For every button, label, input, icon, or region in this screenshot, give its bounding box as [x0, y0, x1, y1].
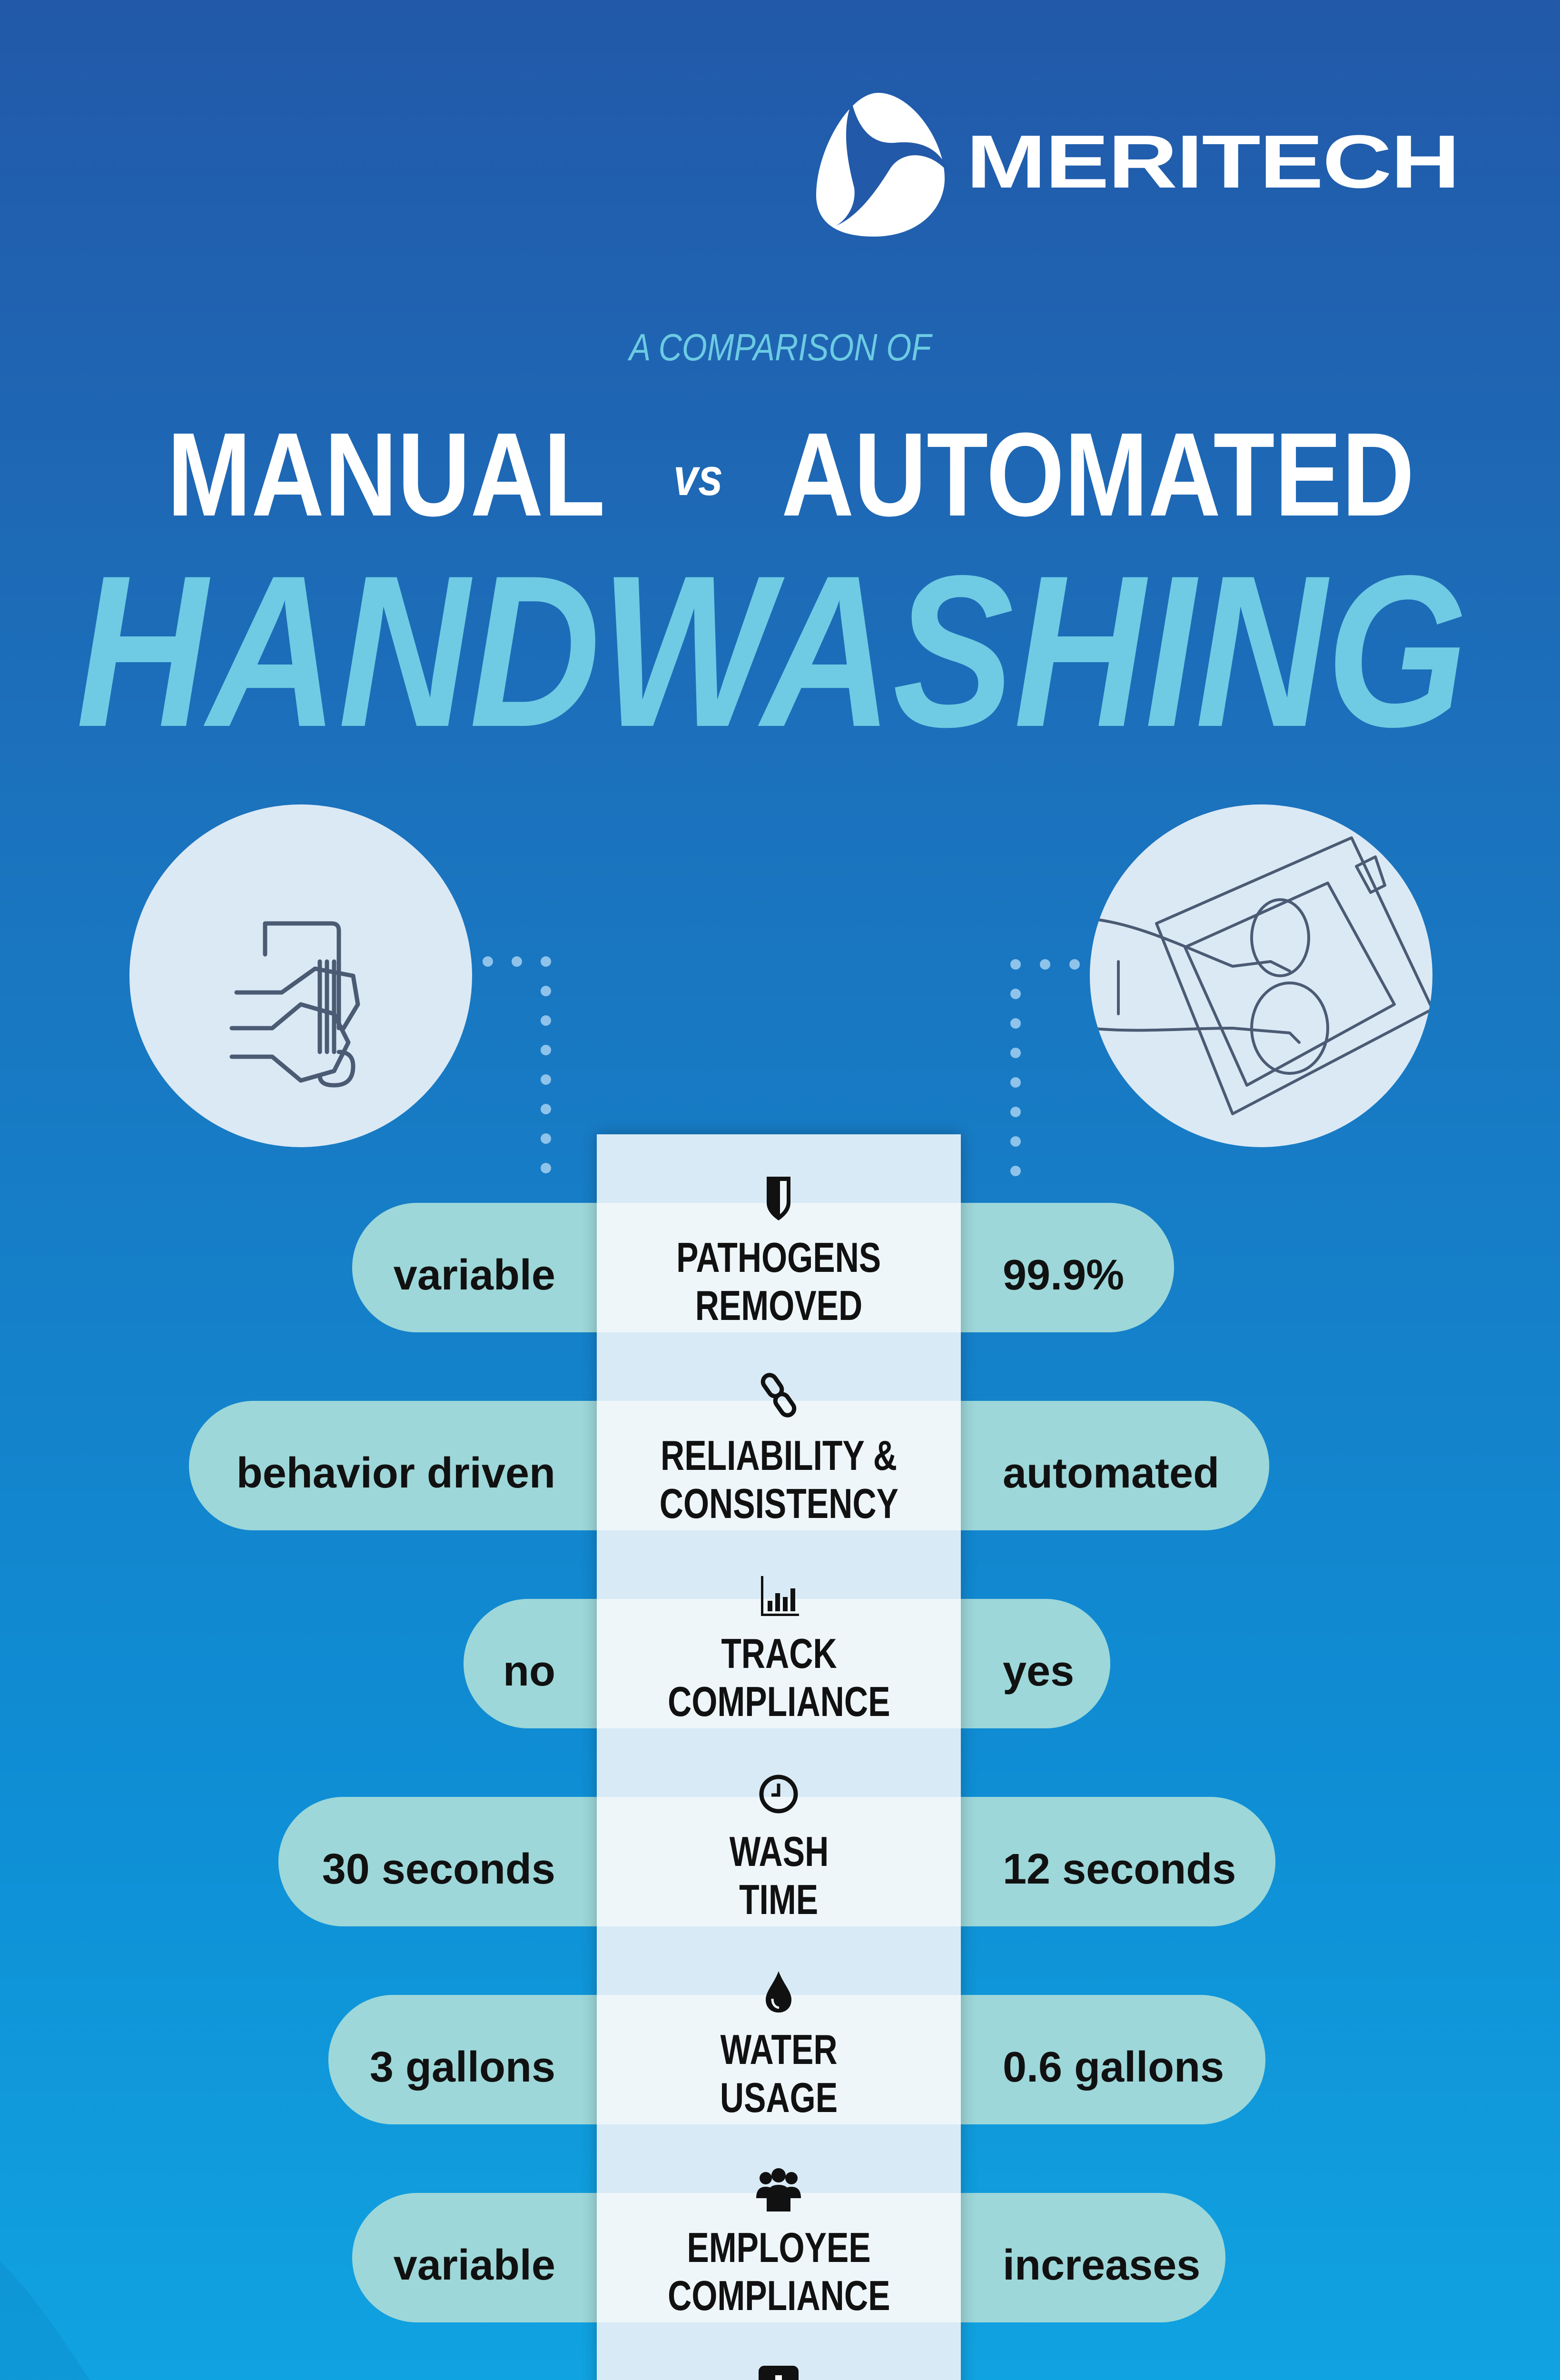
row 1 pill: variable: [394, 1251, 555, 1299]
label: water usage: [597, 2025, 961, 2122]
label: water usage: USAGE: [720, 2074, 838, 2121]
dotted connector left: [483, 956, 552, 1180]
label: reliability & consistency: [597, 1431, 961, 1527]
row 3 pill: [464, 1599, 1110, 1728]
row 5 pill: 0.6 gallons: [1003, 2043, 1224, 2091]
label: reliability & consistency: CONSISTENCY: [659, 1480, 898, 1527]
row 5 pill: 3 gallons: [370, 2043, 555, 2091]
icon: chain: [757, 1371, 800, 1419]
icon: logo drop: [807, 93, 952, 237]
row 6 pill: [352, 2193, 1225, 2322]
row 2 pill: [189, 1401, 1269, 1530]
row 4 pill: 30 seconds: [322, 1845, 555, 1893]
label: employee compliance: [597, 2223, 961, 2320]
label: track compliance: [597, 1629, 961, 1726]
label: employee compliance: EMPLOYEE: [687, 2224, 871, 2271]
row 2 pill: behavior driven: [237, 1449, 555, 1497]
row 6 pill: increases: [1003, 2241, 1200, 2289]
title: vs: [673, 448, 723, 506]
row 6 pill: variable: [394, 2241, 555, 2289]
icon: medical plus: [757, 2363, 800, 2380]
label: wash time: TIME: [739, 1876, 819, 1923]
icon: clock: [757, 1769, 800, 1817]
label: employee compliance: COMPLIANCE: [668, 2272, 890, 2319]
row 4 pill: 12 seconds: [1003, 1845, 1236, 1893]
subtitle: A COMPARISON OF: [629, 326, 931, 368]
logo wordmark: MERITECH: [966, 120, 1459, 204]
label: reliability & consistency: RELIABILITY &: [661, 1432, 897, 1479]
title: [76, 419, 1485, 733]
label: pathogens removed: PATHOGENS: [676, 1234, 881, 1281]
central category column: [597, 1134, 961, 2380]
label: pathogens removed: [597, 1233, 961, 1329]
logo: [804, 90, 1471, 238]
row 3 pill: yes: [1003, 1647, 1074, 1695]
label: pathogens removed: REMOVED: [695, 1282, 862, 1329]
row 1 pill: [352, 1203, 1174, 1332]
row 4 pill: [278, 1797, 1275, 1926]
label: track compliance: TRACK: [721, 1630, 837, 1677]
row 1 pill: 99.9%: [1003, 1251, 1124, 1299]
icon: people: [752, 2165, 805, 2212]
icon: water drop: [757, 1967, 800, 2015]
label: wash time: WASH: [729, 1828, 829, 1875]
icon: shield: [757, 1174, 800, 1222]
illustration: manual handwashing circle: [129, 804, 472, 1147]
label: water usage: WATER: [721, 2026, 837, 2073]
background water splash: [0, 2190, 1560, 2380]
row 5 pill: [328, 1995, 1265, 2124]
dotted connector right: [1010, 959, 1079, 1183]
label: wash time: [597, 1827, 961, 1924]
illustration: automated handwashing circle: [1090, 804, 1432, 1147]
row 3 pill: no: [503, 1647, 555, 1695]
row 2 pill: automated: [1003, 1449, 1219, 1497]
label: track compliance: COMPLIANCE: [668, 1678, 890, 1725]
icon: bar chart: [757, 1572, 800, 1620]
comparison pills: [189, 1203, 1452, 2380]
